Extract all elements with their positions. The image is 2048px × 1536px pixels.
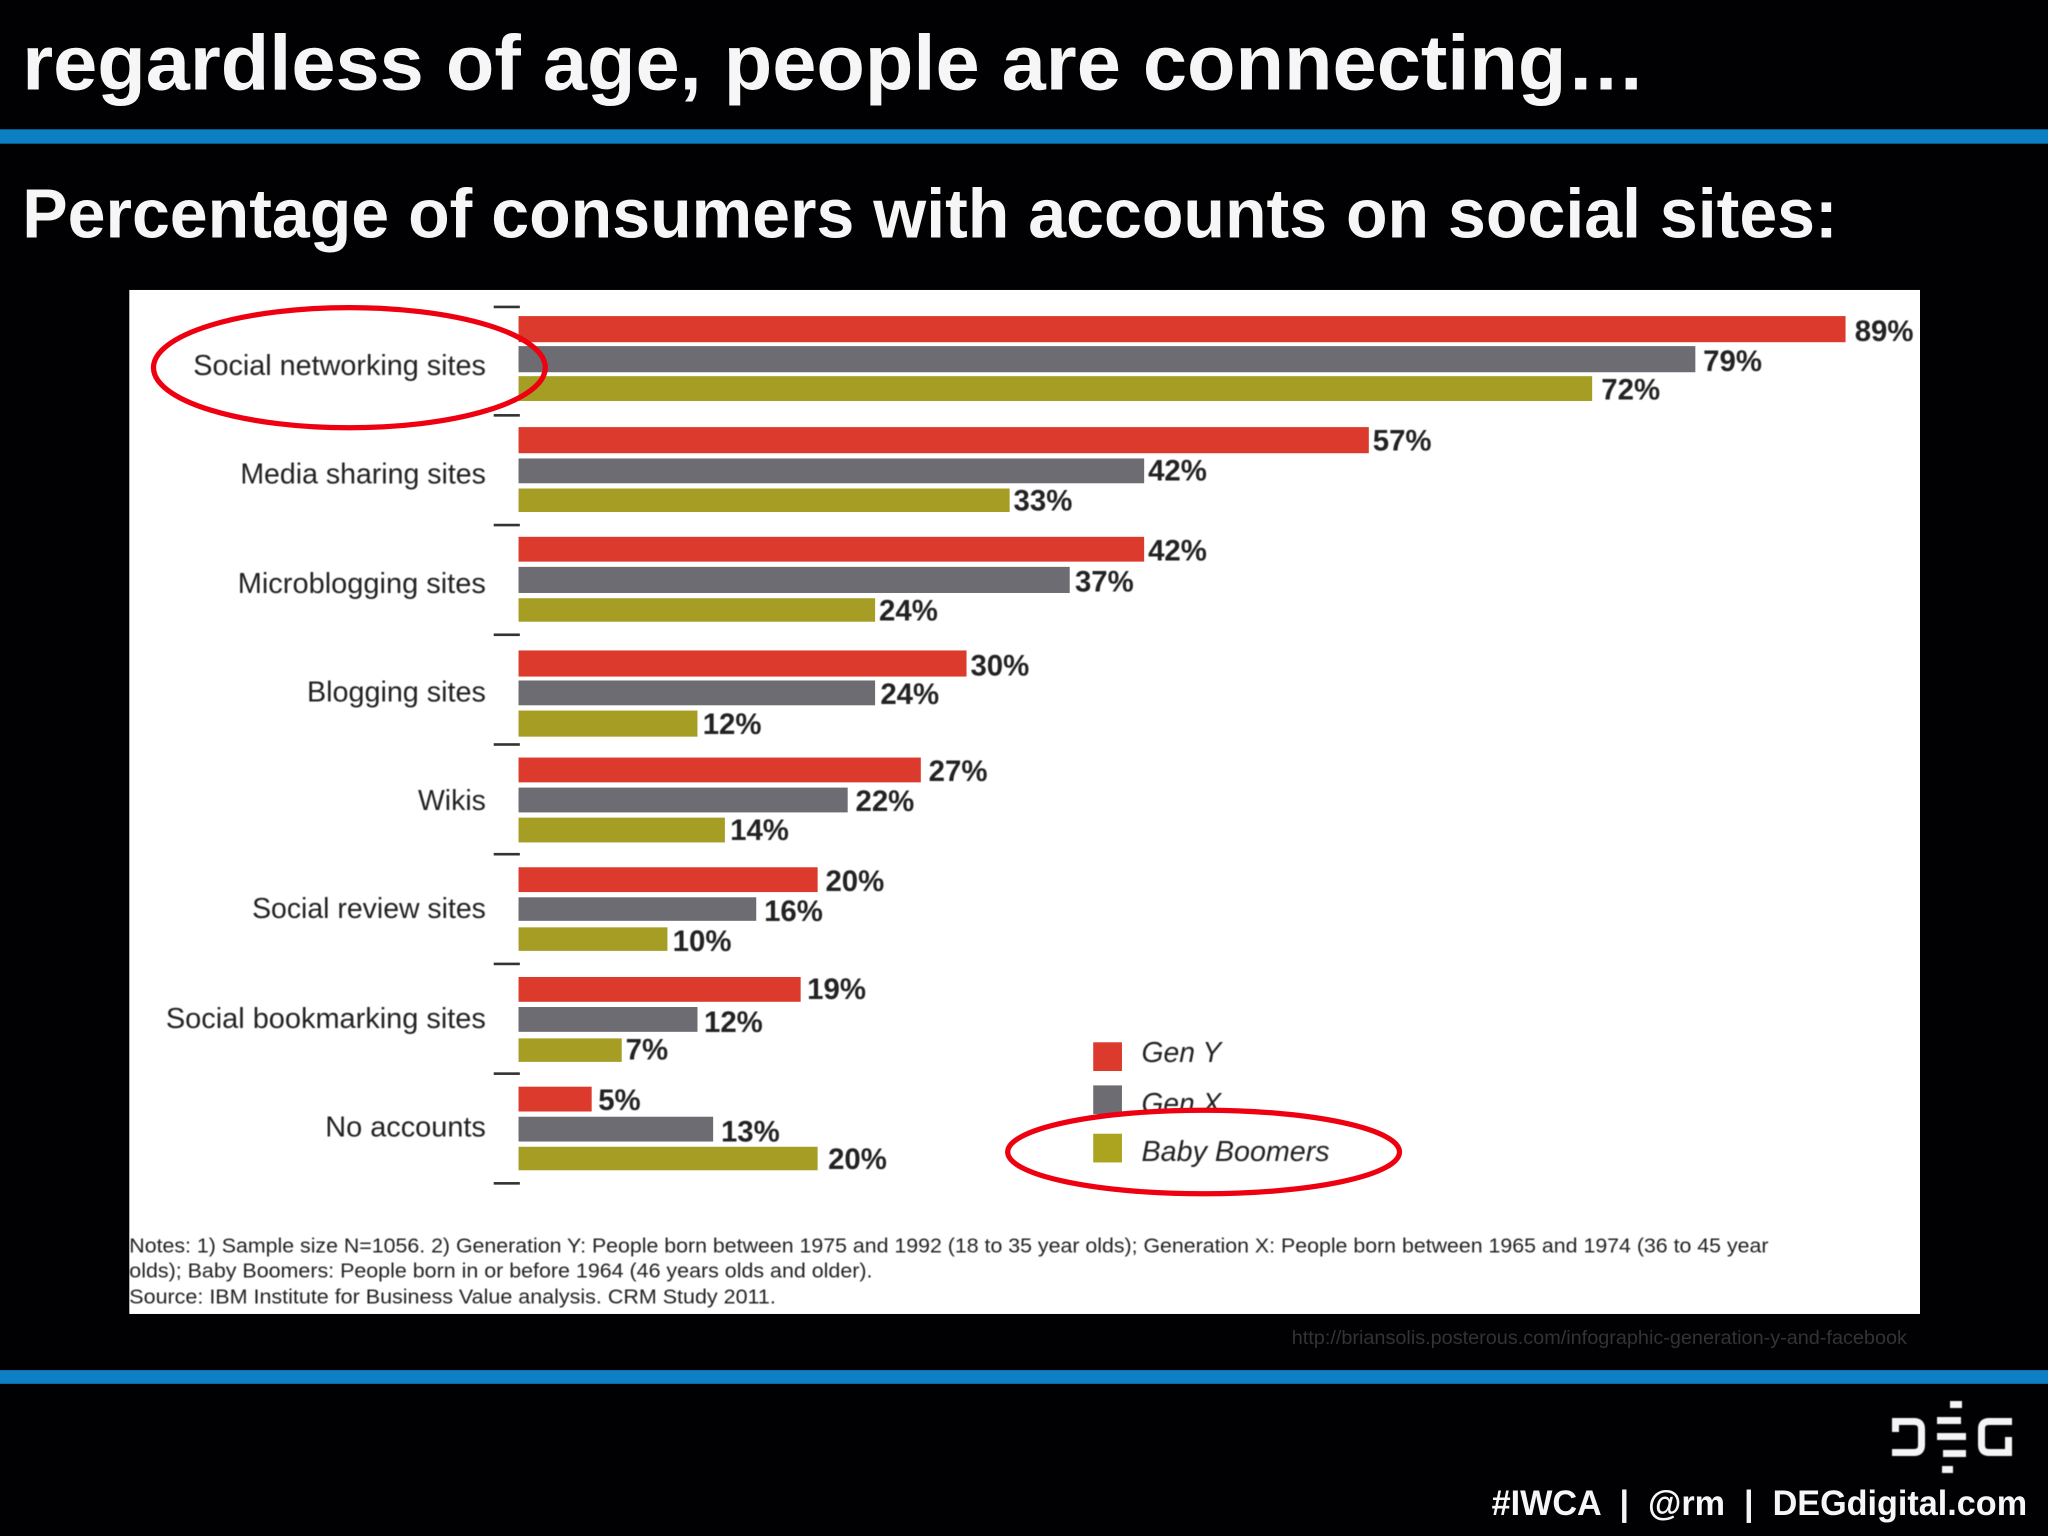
- category labels: Media sharing sites: [240, 458, 486, 490]
- bars: social networking sites: 79%: [1703, 345, 1762, 378]
- bars: microblogging sites: [519, 534, 1207, 627]
- axis ticks: [494, 306, 520, 1185]
- bars: microblogging sites: 42%: [1148, 534, 1207, 567]
- bars: blogging sites: [519, 649, 1029, 741]
- bars: blogging sites: 12%: [703, 708, 761, 741]
- legend: Baby Boomers: [1142, 1136, 1330, 1168]
- category labels: Wikis: [418, 785, 486, 817]
- panel: chart: [129, 290, 1920, 1314]
- legend: Gen X: [1142, 1088, 1223, 1120]
- notes: [129, 1236, 1769, 1309]
- bars: social bookmarking sites: 12%: [704, 1006, 763, 1039]
- bars: blogging sites: 24%: [880, 678, 939, 711]
- bars: wikis: 22%: [856, 785, 914, 818]
- icon: DEG logo: [1892, 1401, 2012, 1473]
- bars: microblogging sites: 24%: [879, 594, 938, 627]
- source url: http://briansolis.posterous.com/infographic-generation-y-and-facebook: [1292, 1327, 1907, 1349]
- bars: media sharing sites: 42%: [1148, 455, 1207, 488]
- category labels: Social networking sites: [193, 350, 486, 382]
- bars: social bookmarking sites: 19%: [807, 973, 866, 1006]
- callout: baby boomers ellipse: [1008, 1110, 1400, 1194]
- top blue rule: [0, 129, 2048, 144]
- bars: media sharing sites: 33%: [1014, 485, 1072, 518]
- bars: social networking sites: [519, 315, 1913, 407]
- bars: wikis: [519, 755, 987, 847]
- bars: blogging sites: 30%: [970, 649, 1029, 682]
- bars: social review sites: 16%: [764, 895, 823, 928]
- bars: social bookmarking sites: [519, 973, 866, 1066]
- bars: no accounts: 20%: [828, 1143, 887, 1176]
- footer text: #IWCA | @rm | DEGdigital.com: [1492, 1484, 2027, 1523]
- bars: no accounts: 5%: [598, 1084, 641, 1117]
- bars: media sharing sites: 57%: [1373, 425, 1432, 458]
- notes: Notes: 1) Sample size N=1056. 2) Generation Y: People born between 1975 and 1992 (18 to 35 year olds); Generation X: People born between 1965 and 1974 (36 to 45 year: [129, 1236, 1769, 1258]
- category labels: [166, 350, 486, 1143]
- bars: social bookmarking sites: 7%: [626, 1033, 668, 1066]
- legend: Gen Y: [1142, 1037, 1223, 1069]
- bars: no accounts: [519, 1084, 887, 1176]
- category labels: Social review sites: [252, 893, 486, 925]
- notes: olds); Baby Boomers: People born in or before 1964 (46 years olds and older).: [129, 1260, 872, 1282]
- category labels: No accounts: [325, 1111, 486, 1143]
- bars: wikis: 27%: [929, 755, 987, 788]
- bars: social networking sites: 89%: [1855, 315, 1913, 348]
- bars: microblogging sites: 37%: [1075, 566, 1134, 599]
- category labels: Microblogging sites: [238, 568, 486, 600]
- subtitle: Percentage of consumers with accounts on social sites:: [22, 175, 1838, 253]
- category labels: Blogging sites: [307, 676, 486, 708]
- bottom blue rule: [0, 1370, 2048, 1384]
- notes: Source: IBM Institute for Business Value analysis. CRM Study 2011.: [129, 1287, 776, 1309]
- legend: [1008, 1037, 1400, 1194]
- bars: social review sites: [519, 865, 884, 958]
- bars: no accounts: 13%: [721, 1116, 780, 1149]
- title: regardless of age, people are connecting…: [22, 18, 1646, 106]
- bars: social review sites: 20%: [825, 865, 884, 898]
- category labels: Social bookmarking sites: [166, 1003, 486, 1035]
- bars: social review sites: 10%: [673, 925, 731, 958]
- bars: social networking sites: 72%: [1601, 374, 1660, 407]
- callout: social networking sites ellipse: [153, 308, 545, 428]
- bars: wikis: 14%: [730, 814, 789, 847]
- bars: media sharing sites: [519, 425, 1432, 518]
